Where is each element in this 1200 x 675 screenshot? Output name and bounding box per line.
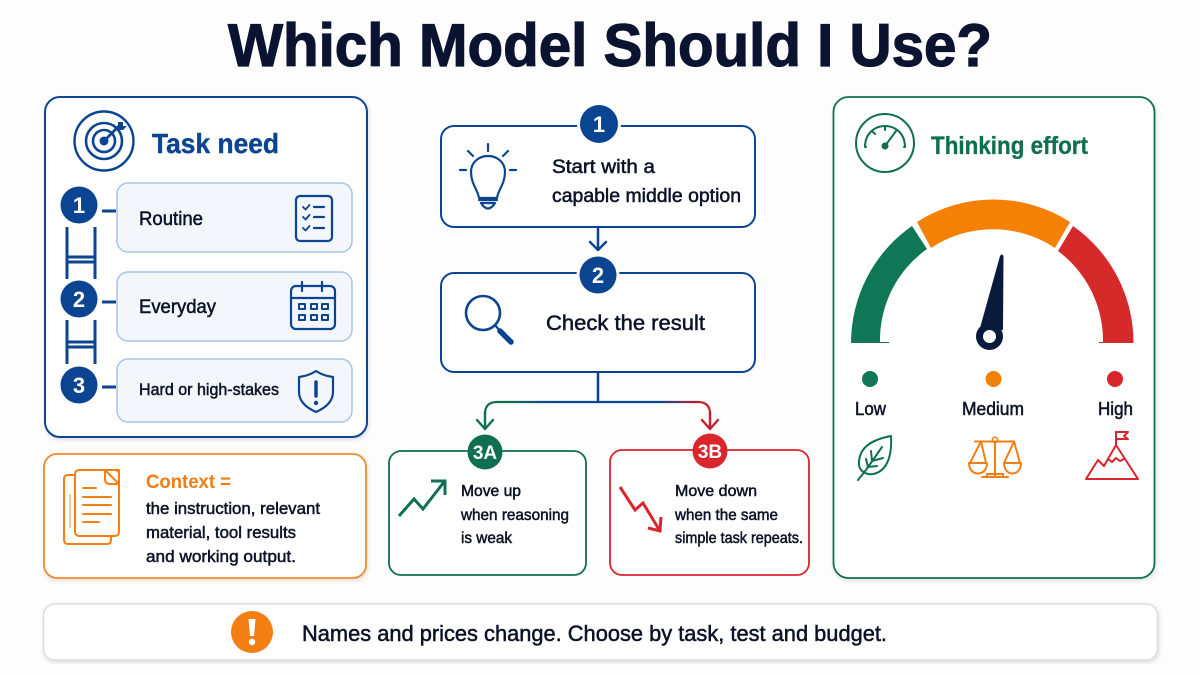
arrow: step 1 to step 2 (590, 227, 606, 250)
badge 2: 2 (592, 263, 604, 288)
icon: magnifier (466, 296, 511, 342)
branching arrows (477, 372, 718, 429)
text: 3B: Move down (675, 483, 757, 500)
text: footer: Names and prices change. Choose by task, test and budget. (302, 621, 887, 646)
step 3: hard or high-stakes: 3 (73, 373, 85, 398)
step 1: routine (60, 183, 352, 252)
text: step 1: Start with a (552, 157, 655, 178)
heading: thinking effort: Thinking effort (931, 132, 1089, 160)
text: context definition: material, tool results (146, 523, 296, 542)
text: step 2: Check the result (546, 312, 705, 335)
text: 3B: simple task repeats. (675, 530, 803, 547)
text: 3A: when reasoning (460, 507, 569, 524)
panel: context (44, 454, 366, 578)
panel 3A: move up (389, 434, 586, 575)
text: context definition: Context = (146, 472, 231, 493)
icon: trend up (399, 481, 445, 516)
badge 3B: 3B (698, 442, 722, 463)
icon: trend down (620, 487, 661, 531)
footer note (44, 604, 1158, 660)
badge 3B (692, 434, 728, 468)
gauge (851, 199, 1134, 346)
icon: shield (299, 371, 333, 412)
panel: thinking effort (834, 97, 1154, 578)
text: 3A (460, 483, 569, 547)
text: context definition: and working output. (146, 547, 296, 566)
step 2 box: check the result (441, 254, 755, 372)
text: 3A: is weak (461, 530, 513, 547)
text: context definition: the instruction, relevant (146, 499, 320, 518)
title: Which Model Should I Use? (228, 12, 992, 79)
badge 3A: 3A (473, 443, 497, 464)
text: 3B: when the same (674, 507, 778, 524)
text: 3A: Move up (461, 483, 521, 500)
text: step 1 (552, 157, 741, 207)
level: high (1086, 371, 1138, 479)
icon: documents (64, 470, 119, 544)
text: 3B (674, 483, 803, 547)
step 1 box: start with a capable middle option (441, 102, 755, 227)
badge 1 (577, 102, 621, 146)
level: medium: Medium (962, 399, 1024, 419)
icon: calendar (291, 282, 335, 329)
ladder connectors (67, 211, 116, 387)
step 1: routine: Routine (139, 209, 203, 230)
icon: checklist (296, 196, 332, 241)
level: high: High (1098, 399, 1133, 419)
text: step 1: capable middle option (552, 186, 741, 207)
icon: warning (231, 611, 273, 653)
gauge needle (980, 254, 1004, 346)
icon: target (74, 112, 134, 170)
level: low: Low (855, 399, 887, 419)
icon: speedometer (856, 114, 914, 172)
heading: task need: Task need (152, 128, 279, 159)
icon: leaf (858, 436, 891, 480)
panel 3B: move down (610, 434, 809, 575)
badge 3A (468, 434, 502, 470)
badge 2 (576, 254, 620, 296)
icon: mountain with flag (1086, 431, 1138, 479)
badge 1: 1 (593, 112, 605, 137)
step 2: everyday: 2 (73, 287, 85, 312)
icon: light bulb (460, 144, 516, 208)
step 3: hard or high-stakes: Hard or high-stakes (139, 380, 279, 399)
text: context definition (146, 472, 320, 566)
step 2: everyday: Everyday (139, 297, 216, 318)
step 2: everyday (60, 272, 352, 341)
level: medium (962, 371, 1024, 477)
level: low (855, 371, 891, 480)
step 1: routine: 1 (73, 193, 85, 218)
icon: scales (969, 437, 1021, 477)
step 3: hard or high-stakes (60, 359, 352, 422)
panel: task need (45, 97, 367, 437)
